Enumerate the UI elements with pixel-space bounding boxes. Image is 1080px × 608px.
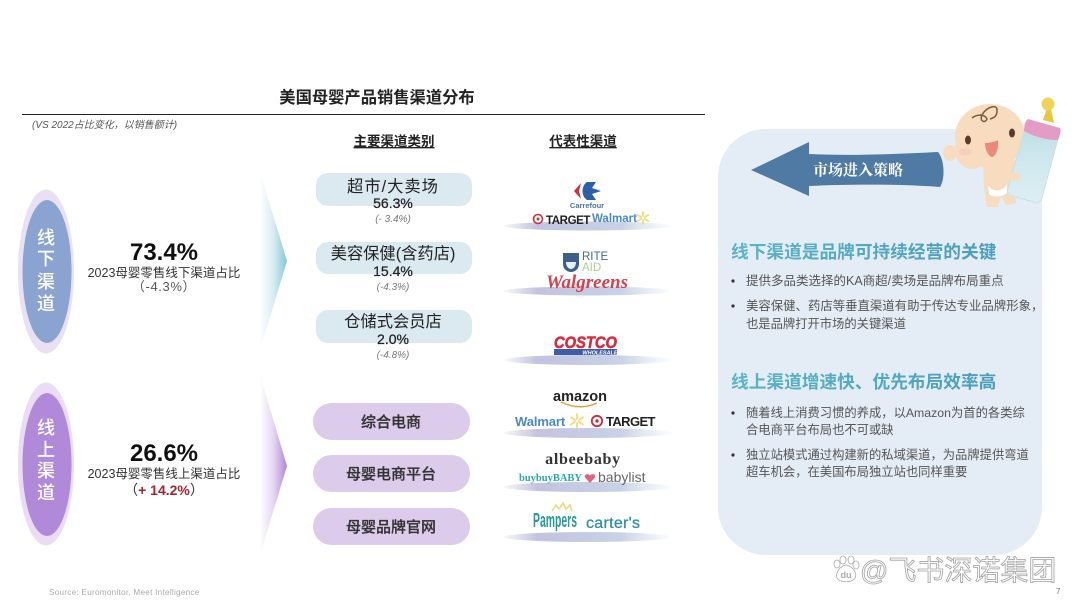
- channel: brand sites: [313, 508, 470, 545]
- online share stat: [88, 440, 240, 498]
- logo: Costco: COSTCO: [554, 333, 617, 352]
- channel: maternity e-commerce: 母婴电商平台: [346, 465, 436, 483]
- logo: Walmart: Walmart: [592, 213, 637, 225]
- logo: Amazon: amazon: [553, 389, 607, 405]
- online share stat: 26.6%: [130, 440, 198, 467]
- channel: general e-commerce: 综合电商: [361, 413, 421, 431]
- logo: babylist: babylist: [598, 469, 646, 485]
- offline share stat: 73.4%: [130, 239, 198, 266]
- logo: Carter's: carter's: [586, 515, 640, 532]
- channel: warehouse club: [316, 310, 472, 361]
- offline share stat: （-4.3%）: [132, 279, 196, 294]
- source note: Source: Euromonitor, Meet Intelligence: [49, 588, 200, 597]
- watermark: du: [840, 570, 852, 580]
- arrow: online chevron: [260, 375, 287, 555]
- channel: warehouse club: 仓储式会员店: [344, 313, 442, 331]
- channel: general e-commerce: [313, 403, 470, 440]
- heading: offline channels are key: 线下渠道是品牌可持续经营的关键: [731, 241, 997, 262]
- offline share stat: 2023母婴零售线下渠道占比: [88, 265, 240, 280]
- panel: online channel oval: 渠: [37, 461, 55, 481]
- logo: Pampers: [533, 503, 577, 532]
- logo: Carrefour: [570, 182, 604, 210]
- panel: offline channel oval: 渠: [37, 272, 55, 292]
- bullet list: online: [731, 405, 1029, 479]
- title: 美国母婴产品销售渠道分布: [279, 88, 475, 107]
- panel: online channel oval: 道: [37, 483, 55, 503]
- logo: buybuyBABY: buybuyBABY: [519, 473, 583, 484]
- panel: offline channel oval: 线: [37, 228, 55, 248]
- channel: beauty and pharmacy: [316, 242, 472, 293]
- bullet list: offline: [731, 273, 1043, 331]
- online share stat: （+ 14.2%）: [124, 482, 204, 498]
- bullet list: offline: 也是品牌打开市场的关键渠道: [746, 316, 906, 331]
- logo: Target: TARGET: [546, 215, 590, 227]
- logo: Rite Aid: AID: [582, 262, 601, 274]
- bullet list: online: 随着线上消费习惯的养成，以Amazon为首的各类综: [746, 405, 1025, 420]
- logo: Walgreens: Walgreens: [546, 272, 628, 293]
- heading: online channels grow fast: 线上渠道增速快、优先布局效率高: [731, 371, 996, 392]
- channel: warehouse club: 2.0%: [377, 331, 409, 347]
- panel: market entry strategy: [718, 129, 1042, 555]
- panel: online channel oval: 上: [37, 440, 55, 460]
- page number: 7: [1056, 587, 1061, 596]
- bullet list: offline: 提供多品类选择的KA商超/卖场是品牌布局重点: [746, 273, 1004, 288]
- arrow: market entry strategy: 市场进入策略: [813, 159, 903, 180]
- channel: supermarket: [316, 173, 472, 225]
- channel: warehouse club: (-4.8%): [377, 350, 409, 361]
- channel: beauty and pharmacy: 15.4%: [373, 263, 413, 279]
- channel: beauty and pharmacy: 美容保健(含药店): [331, 245, 455, 263]
- logo: albeebaby: albeebaby: [545, 451, 621, 468]
- channel: supermarket: (- 3.4%): [375, 214, 411, 225]
- arrow: market entry strategy: [751, 142, 944, 196]
- channel: supermarket: 超市/大卖场: [347, 178, 439, 196]
- panel: online channel oval: [18, 382, 74, 546]
- logo: Pampers: Pampers: [533, 510, 577, 532]
- channel: maternity e-commerce: [313, 455, 470, 492]
- offline share stat: [88, 239, 240, 294]
- logo: Target: TARGET: [606, 414, 656, 429]
- channel: beauty and pharmacy: (-4.3%): [377, 282, 409, 293]
- note: comparison basis: (VS 2022占比变化，以销售额计): [32, 119, 177, 131]
- bullet list: online: 超车机会，在美国布局独立站也同样重要: [746, 464, 967, 479]
- watermark: @飞书深诺集团: [860, 555, 1056, 586]
- channel: brand sites: 母婴品牌官网: [346, 519, 436, 536]
- logo: Rite Aid: [563, 251, 609, 274]
- bullet list: online: 合电商平台布局也不可或缺: [746, 422, 894, 437]
- panel: offline channel oval: 下: [37, 249, 55, 269]
- logo: Costco: WHOLESALE: [582, 350, 618, 356]
- column heading: representative channels: 代表性渠道: [549, 133, 617, 149]
- online share stat: 2023母婴零售线上渠道占比: [88, 466, 240, 481]
- channel: supermarket: 56.3%: [373, 195, 413, 211]
- bullet list: offline: 美容保健、药店等垂直渠道有助于传达专业品牌形象，: [746, 298, 1043, 313]
- arrow: offline chevron: [260, 172, 287, 350]
- column heading: main channel types: 主要渠道类别: [354, 133, 434, 149]
- logo shadows: [504, 222, 672, 542]
- icon: baby with bottle: [943, 98, 1061, 207]
- panel: offline channel oval: [18, 190, 74, 354]
- icon: heart: [585, 474, 595, 483]
- bullet list: online: 独立站模式通过构建新的私域渠道，为品牌提供弯道: [746, 447, 1029, 462]
- logo: Rite Aid: RITE: [582, 251, 609, 263]
- panel: offline channel oval: 道: [37, 294, 55, 314]
- logo: Walmart: Walmart: [515, 414, 566, 429]
- logo: Carrefour: Carrefour: [570, 201, 604, 210]
- panel: online channel oval: 线: [37, 418, 55, 438]
